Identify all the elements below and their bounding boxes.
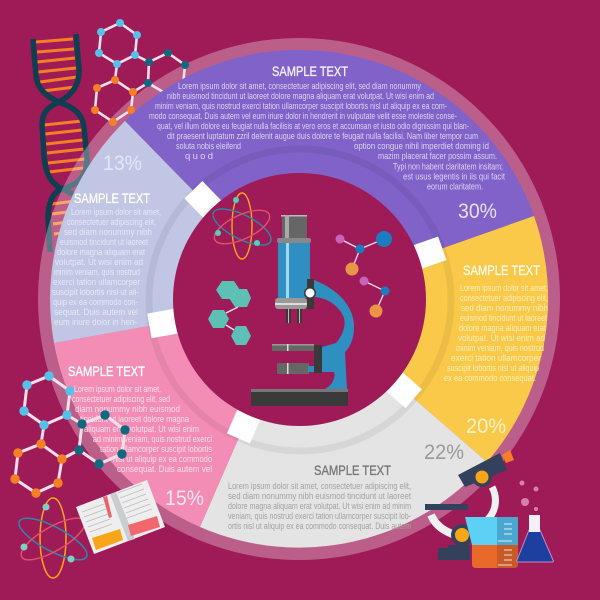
text block: yellow: suscipit lobortis nisl ut aliquip	[447, 363, 539, 374]
percentage: 20%: 20%	[466, 415, 506, 438]
text block: lavender: sed diam nonummy nibh	[64, 227, 152, 238]
text block: yellow: exerci tation ullamcorper	[451, 353, 541, 364]
text block: purple: est usus legentis in iis qui facit	[403, 172, 505, 182]
text block: lavender: Lorem ipsum dolor sit amet,	[71, 207, 161, 218]
text block: lavender: suscipit lobortis nisl ut ali-	[52, 287, 139, 298]
text block: pink: consectetuer adipiscing elit, sed	[72, 394, 170, 405]
text block: pink: nisl ut aliquip ex ea commodo	[113, 454, 212, 465]
text block: grey: sed diam nonummy nibh euismod tincidunt ut laoreet	[228, 491, 411, 502]
white slice tabs	[147, 181, 446, 443]
text block: yellow: ex ea commodo consequat.	[444, 373, 536, 384]
icon: top hexagon molecule	[91, 19, 189, 126]
text block: grey: dolore magna aliquam erat volutpat. Ut wisi enim ad minim	[228, 501, 411, 512]
text block: purple: quod	[185, 151, 213, 162]
text block: purple: Typi non habent claritatem insitam;	[393, 162, 503, 172]
percentage: 22%: 22%	[424, 441, 464, 464]
icon: small microscope	[425, 450, 514, 560]
icon: ball-and-stick molecules	[336, 231, 392, 318]
icon: centre atom	[208, 193, 276, 259]
text block: purple: minim veniam, quis nostrud exerci tation ullamcorper suscipit lobortis nisl ut aliquip ex ea com-	[155, 101, 447, 112]
icon: central microscope	[251, 215, 354, 406]
heading: lavender: SAMPLE TEXT	[74, 190, 150, 206]
text block: lavender: volutpat. Ut wisi enim ad	[55, 257, 143, 268]
text block: pink: Lorem ipsum dolor sit amet,	[74, 384, 161, 395]
heading: pink: SAMPLE TEXT	[68, 363, 145, 379]
slice: lavender 13%	[50, 121, 299, 343]
text block: grey: ortis nisl ut aliquip ex ea commodo consequat. Duis autem	[228, 521, 411, 532]
text block: purple: modo consequat. Duis autem vel eum iriure dolor in hendrerit in vulputate velit esse molestie conse-	[149, 111, 457, 122]
text block: yellow: Lorem ipsum dolor sit amet,	[460, 283, 548, 294]
text block: lavender	[52, 190, 161, 328]
text block: yellow: consectetuer adipiscing elit,	[460, 293, 548, 304]
text block: pink: tincidunt ut laoreet dolore magna	[80, 414, 190, 425]
text block: grey: veniam, quis nostrud exerci tation ullamcorper suscipit lob-	[228, 511, 411, 522]
text block: purple: option congue nihil imperdiet doming id	[354, 141, 489, 152]
percentage: 30%: 30%	[458, 200, 497, 223]
text block: lavender: exerci tation ullamcorper	[53, 277, 140, 288]
text block: purple: soluta nobis eleifend	[176, 141, 241, 152]
centre circle	[173, 173, 426, 426]
text block: purple	[149, 63, 505, 192]
icon: teal hexagon cluster	[208, 281, 251, 345]
text block: purple: nibh euismod tincidunt ut laoreet dolore magna aliquam erat volutpat. Ut wisi enim ad	[167, 91, 434, 102]
text block: purple: quat, vel illum dolore eu feugiat nulla facilisis at vero eros et accumsan et iusto odio dignissim qui blan-	[157, 121, 469, 132]
slice: grey 22%	[200, 299, 487, 548]
text block: pink	[68, 363, 212, 475]
inner shaded band	[149, 149, 451, 451]
icon: beaker	[465, 517, 518, 568]
pie chart	[50, 50, 548, 548]
text block: lavender: eum iriure dolor in hen-	[54, 317, 137, 328]
heading: purple: SAMPLE TEXT	[272, 63, 348, 79]
text block: pink: ad minim veniam, quis nostrud exerci	[93, 434, 212, 445]
icon: bottom-left atom	[14, 498, 92, 578]
text block: lavender: minim veniam, quis nostrud	[54, 267, 140, 278]
text block: yellow: dolore magna aliquam erat	[459, 323, 546, 334]
text block: yellow: minim veniam, quis nostrud	[456, 343, 544, 354]
outer translucent ring	[38, 38, 560, 560]
text block: purple: dit praesent luptatum zzril delenit augue duis dolore te feugait nulla facilisi. Nam liber tempor cum	[167, 131, 478, 142]
text block: pink: consequat. Duis autem vel	[117, 464, 212, 475]
text block: lavender: euismod tincidunt ut laoreet	[60, 237, 148, 248]
text block: lavender: dolore magna aliquam erat	[57, 247, 145, 258]
icon: bubbles	[520, 480, 538, 511]
heading: grey: SAMPLE TEXT	[314, 462, 391, 478]
slice: yellow 20%	[299, 216, 548, 462]
percentage: 15%: 15%	[165, 487, 204, 510]
icon: open book	[76, 480, 165, 554]
heading: yellow: SAMPLE TEXT	[463, 262, 540, 278]
text block: yellow: euismod tincidunt ut laoreet	[460, 313, 547, 324]
text block: yellow: volutpat. Ut wisi enim ad	[458, 333, 545, 344]
text block: yellow: sed diam nonummy nibh	[461, 303, 548, 314]
text block: purple: Lorem ipsum dolor sit amet, consectetuer adipiscing elit, sed diam nonummy	[178, 81, 421, 92]
slice: purple 30%	[125, 50, 534, 299]
text block: purple: eorum claritatem.	[427, 182, 483, 192]
text block: grey	[228, 462, 411, 532]
text block: pink: aliquam erat volutpat. Ut wisi enim	[84, 424, 199, 435]
text block: lavender: consectetuer adipiscing elit,	[67, 217, 156, 228]
text block: purple: mazim placerat facer possim assum.	[378, 151, 497, 162]
percentage: 13%: 13%	[103, 152, 142, 175]
text block: pink: tation ullamcorper suscipit lobortis	[100, 444, 212, 455]
text block: lavender: sequat. Duis autem vel	[54, 307, 138, 318]
icon: DNA helix	[33, 34, 87, 252]
text block: pink: diam nonummy nibh euismod	[75, 404, 180, 415]
icon: bottom-left hexagon molecule	[10, 371, 130, 498]
icon: flask	[517, 515, 553, 562]
text block: grey: Lorem ipsum dolor sit amet, consectetuer adipiscing elit,	[228, 481, 411, 492]
text block: lavender: quip ex ea commodo con-	[53, 297, 138, 308]
text block: yellow	[444, 262, 548, 384]
slice: pink 15%	[54, 299, 299, 527]
